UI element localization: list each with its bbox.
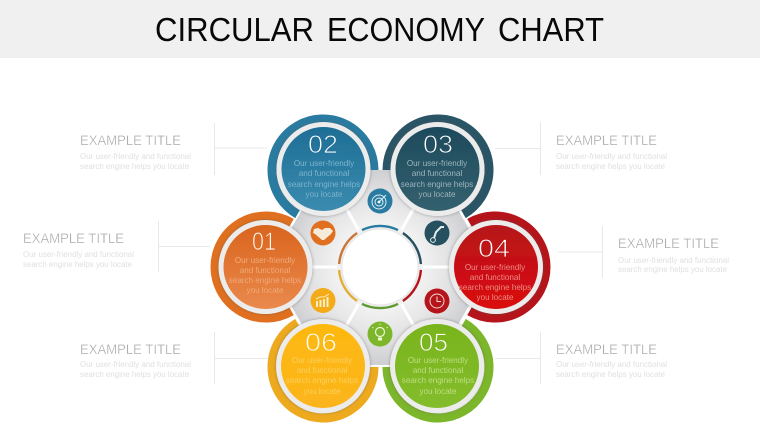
label title: EXAMPLE TITLE: [618, 235, 719, 251]
icon: light bulb: [368, 322, 392, 346]
label title: EXAMPLE TITLE: [80, 132, 181, 148]
text 05: and functional: [413, 366, 463, 375]
text 05: you locate: [420, 387, 457, 396]
circle 01: [215, 216, 310, 318]
label: top left: search engine helps you locate: [80, 162, 190, 171]
icon: bar chart: [310, 288, 336, 313]
label text: Our user-friendly and functional: [23, 250, 134, 259]
icon: robot arm: [424, 220, 450, 246]
text 06: search engine helps: [286, 376, 358, 385]
text 04: you locate: [477, 293, 514, 302]
text 04: Our user-friendly: [465, 263, 526, 272]
title bar: [0, 0, 760, 58]
label text: Our user-friendly and functional: [556, 152, 667, 161]
label: top right: [495, 122, 667, 175]
label title: EXAMPLE TITLE: [80, 341, 181, 357]
number 03: 03: [423, 131, 453, 159]
text 03: you locate: [419, 190, 456, 199]
label: top right: search engine helps you locate: [556, 162, 666, 171]
label text: Our user-friendly and functional: [618, 256, 729, 265]
label: bottom right: search engine helps you locate: [556, 370, 666, 379]
label title: EXAMPLE TITLE: [556, 341, 657, 357]
text 02: and functional: [299, 169, 349, 178]
title: [155, 11, 604, 48]
text 05: Our user-friendly: [408, 356, 469, 365]
text 06: Our user-friendly: [292, 356, 353, 365]
text 05: search engine helps: [402, 376, 474, 385]
label: bottom right: [495, 332, 667, 384]
icon: handshake: [310, 220, 336, 246]
icon: clock: [424, 288, 450, 314]
title: CHART: [498, 11, 604, 48]
label: middle left: search engine helps you locate: [23, 260, 133, 269]
text 02: you locate: [306, 190, 343, 199]
circle 05: [387, 322, 489, 418]
title: CIRCULAR: [155, 11, 314, 48]
text 03: Our user-friendly: [407, 159, 468, 168]
circle 06: [272, 322, 374, 418]
text 02: search engine helps: [288, 180, 360, 189]
text 01: search engine helps: [229, 276, 301, 285]
circle 03: [387, 119, 489, 214]
label: bottom left: search engine helps you locate: [80, 370, 190, 379]
text 01: you locate: [247, 286, 284, 295]
title: ECONOMY: [327, 11, 485, 48]
text 01: and functional: [240, 266, 290, 275]
label: bottom left: [80, 332, 268, 384]
label text: Our user-friendly and functional: [556, 360, 667, 369]
label title: EXAMPLE TITLE: [23, 230, 124, 246]
label: top left: [80, 123, 267, 175]
label text: Our user-friendly and functional: [80, 360, 191, 369]
label title: EXAMPLE TITLE: [556, 132, 657, 148]
label: middle right: search engine helps you locate: [618, 265, 728, 274]
label: middle left: [23, 221, 210, 272]
text 03: and functional: [412, 169, 462, 178]
text 02: Our user-friendly: [294, 159, 355, 168]
label text: Our user-friendly and functional: [80, 152, 191, 161]
central hub: [269, 170, 491, 365]
text 03: search engine helps: [401, 180, 473, 189]
text 04: search engine helps: [459, 283, 531, 292]
label: middle right: [558, 226, 729, 278]
hub ring: six coloured arcs: [339, 226, 421, 308]
text 01: Our user-friendly: [235, 256, 296, 265]
text 06: you locate: [304, 387, 341, 396]
number 02: 02: [308, 131, 338, 159]
text 06: and functional: [297, 366, 347, 375]
number 04: 04: [478, 235, 510, 263]
circle 02: [272, 119, 374, 214]
number 01: 01: [252, 228, 276, 256]
number 06: 06: [305, 329, 337, 357]
text 04: and functional: [470, 273, 520, 282]
icon: target: [368, 188, 392, 214]
number 05: 05: [419, 329, 448, 357]
circle 04: [452, 216, 546, 318]
